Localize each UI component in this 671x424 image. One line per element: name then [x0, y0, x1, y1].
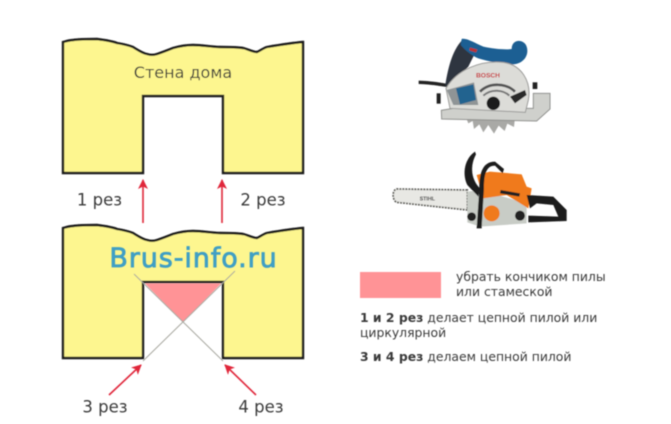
label: cut 4: 4 рез [238, 398, 284, 416]
icon: chainsaw [393, 152, 567, 228]
panel: wall with diagonal cuts [63, 225, 303, 361]
label: cut 3: 3 рез [82, 398, 128, 416]
icon: circular saw [419, 39, 550, 134]
label: cut 1: 1 рез [77, 190, 122, 210]
note: cuts 1 and 2: циркулярной [360, 325, 446, 340]
note: cuts 3 and 4: делаем цепной пилой [423, 349, 571, 364]
legend swatch [360, 272, 441, 298]
watermark: Brus-info.ru [109, 243, 278, 274]
removed triangle [145, 284, 221, 322]
arrow: cut 1 [142, 180, 144, 223]
arrow: cut 2 [221, 180, 223, 223]
diagonal cut lines [134, 271, 235, 361]
brand text: BOSCH [476, 73, 500, 80]
legend text: убрать кончиком пилы [456, 269, 606, 284]
label: cut 2: 2 рез [240, 190, 286, 210]
panel: wall before cuts [63, 39, 303, 173]
note: cuts 1 and 2: делает цепной пилой или [423, 310, 597, 325]
note: cuts 3 and 4: 3 и 4 рез [360, 349, 423, 364]
legend text: или стамеской [456, 284, 552, 299]
note: cuts 1 and 2: 1 и 2 рез [360, 310, 423, 325]
arrow: cut 4 [225, 365, 256, 395]
arrow: cut 3 [109, 365, 141, 395]
brand text: STIHL [420, 197, 436, 203]
wall label: Стена дома [134, 63, 232, 82]
